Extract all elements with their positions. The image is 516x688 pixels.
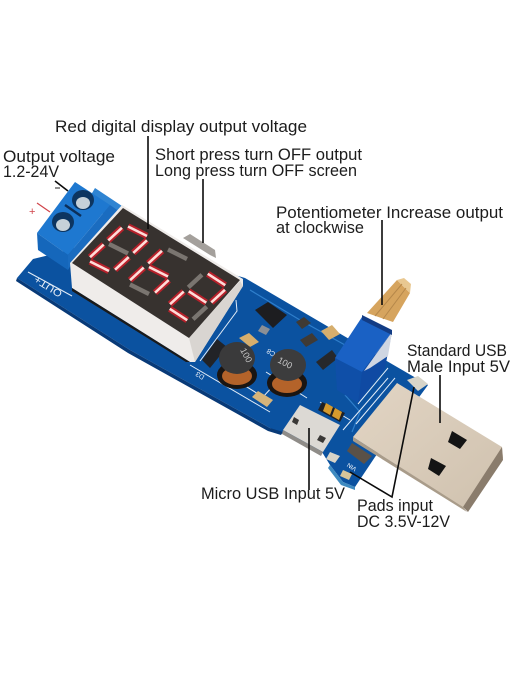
small capacitors and resistors bbox=[239, 317, 345, 422]
display shadow under housing bbox=[72, 288, 190, 362]
minus marker and leader bbox=[55, 181, 68, 191]
digit 1: 0 bbox=[87, 225, 150, 272]
potentiometer bbox=[335, 278, 411, 403]
leader: micro USB bbox=[308, 428, 310, 490]
label: output voltage bbox=[3, 147, 115, 181]
label: potentiometer bbox=[276, 203, 503, 237]
plus marker and leader bbox=[29, 203, 50, 218]
board label: D3: D3 bbox=[195, 370, 206, 380]
digit 3: 2 bbox=[167, 272, 228, 322]
leader: potentiometer bbox=[381, 220, 383, 305]
heading: red digital display: Red digital display output voltage bbox=[55, 117, 307, 136]
USB plug bbox=[353, 383, 503, 512]
digit 2: 4 bbox=[127, 248, 190, 296]
label: standard USB: Standard USB bbox=[407, 341, 507, 360]
circuit board bbox=[16, 235, 428, 490]
inductor left bbox=[217, 342, 257, 389]
label: pads input: DC 3.5V-12V bbox=[357, 512, 451, 531]
diode D3 bbox=[202, 339, 227, 368]
leader: USB bbox=[439, 375, 441, 423]
board label: OUT+: OUT+ bbox=[32, 273, 65, 299]
label: micro USB: Micro USB Input 5V bbox=[201, 484, 346, 503]
label: pads input: Pads input bbox=[357, 496, 433, 515]
label: standard USB bbox=[407, 341, 511, 376]
leader: pads bbox=[350, 387, 414, 497]
product photo: converter board bbox=[16, 182, 503, 512]
display housing bbox=[70, 205, 243, 362]
leader: button bbox=[202, 179, 204, 243]
label: potentiometer: Potentiometer Increase output bbox=[276, 203, 503, 222]
display side bbox=[189, 281, 243, 362]
label: output voltage: 1.2-24V bbox=[3, 162, 60, 181]
display face bbox=[72, 208, 240, 338]
inductor left: 100 bbox=[238, 346, 254, 364]
regulator chip U2 bbox=[255, 302, 287, 328]
label: button press bbox=[155, 145, 362, 180]
terminal block bbox=[37, 182, 125, 270]
board label: C8: C8 bbox=[266, 347, 277, 357]
seven-segment display bbox=[70, 205, 243, 362]
solder pad connector VIN: VIN bbox=[346, 461, 358, 471]
label: button press: Long press turn OFF screen bbox=[155, 161, 357, 180]
inductor right bbox=[267, 349, 307, 397]
label: potentiometer: at clockwise bbox=[276, 218, 364, 237]
label: pads input bbox=[357, 496, 451, 531]
leader: display bbox=[147, 136, 149, 229]
plus marker and leader: + bbox=[29, 206, 35, 218]
label: standard USB: Male Input 5V bbox=[407, 357, 511, 376]
push button bbox=[183, 234, 216, 258]
label: button press: Short press turn OFF output bbox=[155, 145, 362, 164]
inductor right: 100 bbox=[276, 355, 294, 371]
micro USB socket bbox=[282, 405, 340, 456]
label: output voltage: Output voltage bbox=[3, 147, 115, 166]
solder pad connector VIN bbox=[326, 376, 428, 480]
